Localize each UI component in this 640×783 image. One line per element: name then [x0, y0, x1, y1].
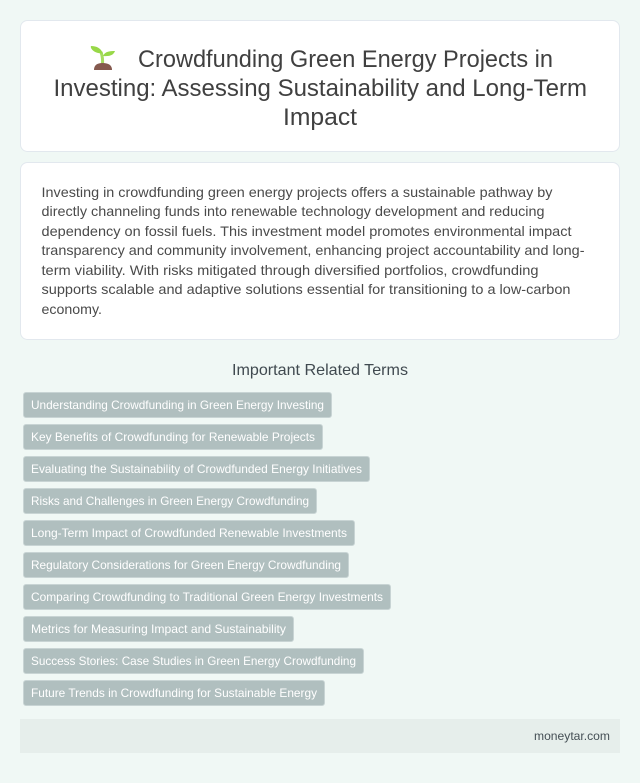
text block: summary paragraph: directly channeling funds into renewable technology development and reducing	[42, 203, 544, 219]
tag 3: Evaluating the Sustainability of Crowdfunded Energy Initiatives	[31, 462, 362, 476]
list: related term tags	[24, 392, 390, 706]
text block: summary paragraph	[42, 184, 585, 317]
heading: Investing: Assessing Sustainability and Long-Term	[54, 75, 587, 102]
tag 2	[24, 424, 322, 450]
tag 8	[24, 616, 294, 642]
panel: title card	[20, 20, 620, 152]
footer source text: moneytar.com	[534, 729, 610, 743]
heading: Impact	[283, 104, 357, 131]
tag 8: Metrics for Measuring Impact and Sustainability	[31, 622, 286, 636]
text block: summary paragraph: dependency on fossil fuels. This investment model promotes environmental impact	[42, 223, 572, 239]
tag 10	[24, 680, 324, 706]
heading: Crowdfunding Green Energy Projects in	[138, 46, 553, 73]
icon: sprout	[91, 46, 115, 70]
tag 5: Long-Term Impact of Crowdfunded Renewable Investments	[31, 526, 347, 540]
heading: important related terms: Important Related Terms	[232, 362, 408, 379]
tag 6	[24, 552, 348, 578]
tag 9: Success Stories: Case Studies in Green Energy Crowdfunding	[31, 654, 356, 668]
tag 4	[24, 488, 316, 514]
text block: summary paragraph: transparency and community involvement, enhancing project accountability and long-	[42, 242, 585, 258]
tag 3	[24, 456, 370, 482]
tag 1	[24, 392, 332, 418]
tag 2: Key Benefits of Crowdfunding for Renewable Projects	[31, 430, 315, 444]
tag 5	[24, 520, 354, 546]
text block: summary paragraph: term viability. With risks mitigated through diversified portfolios, crowdfunding	[42, 262, 538, 278]
tag 1: Understanding Crowdfunding in Green Energy Investing	[31, 398, 324, 412]
text block: summary paragraph: Investing in crowdfunding green energy projects offers a sustainable pathway by	[42, 184, 552, 200]
tag 7	[24, 584, 390, 610]
heading	[54, 46, 587, 131]
tag 6: Regulatory Considerations for Green Energy Crowdfunding	[31, 558, 341, 572]
text block: summary paragraph: supports scalable and adaptive solutions essential for transitioning to a low-carbon	[42, 281, 570, 297]
panel: summary card	[20, 162, 620, 340]
footer bar	[20, 719, 620, 753]
tag 10: Future Trends in Crowdfunding for Sustainable Energy	[31, 686, 317, 700]
tag 9	[24, 648, 364, 674]
tag 4: Risks and Challenges in Green Energy Crowdfunding	[31, 494, 309, 508]
tag 7: Comparing Crowdfunding to Traditional Green Energy Investments	[31, 590, 383, 604]
text block: summary paragraph: economy.	[42, 301, 102, 317]
